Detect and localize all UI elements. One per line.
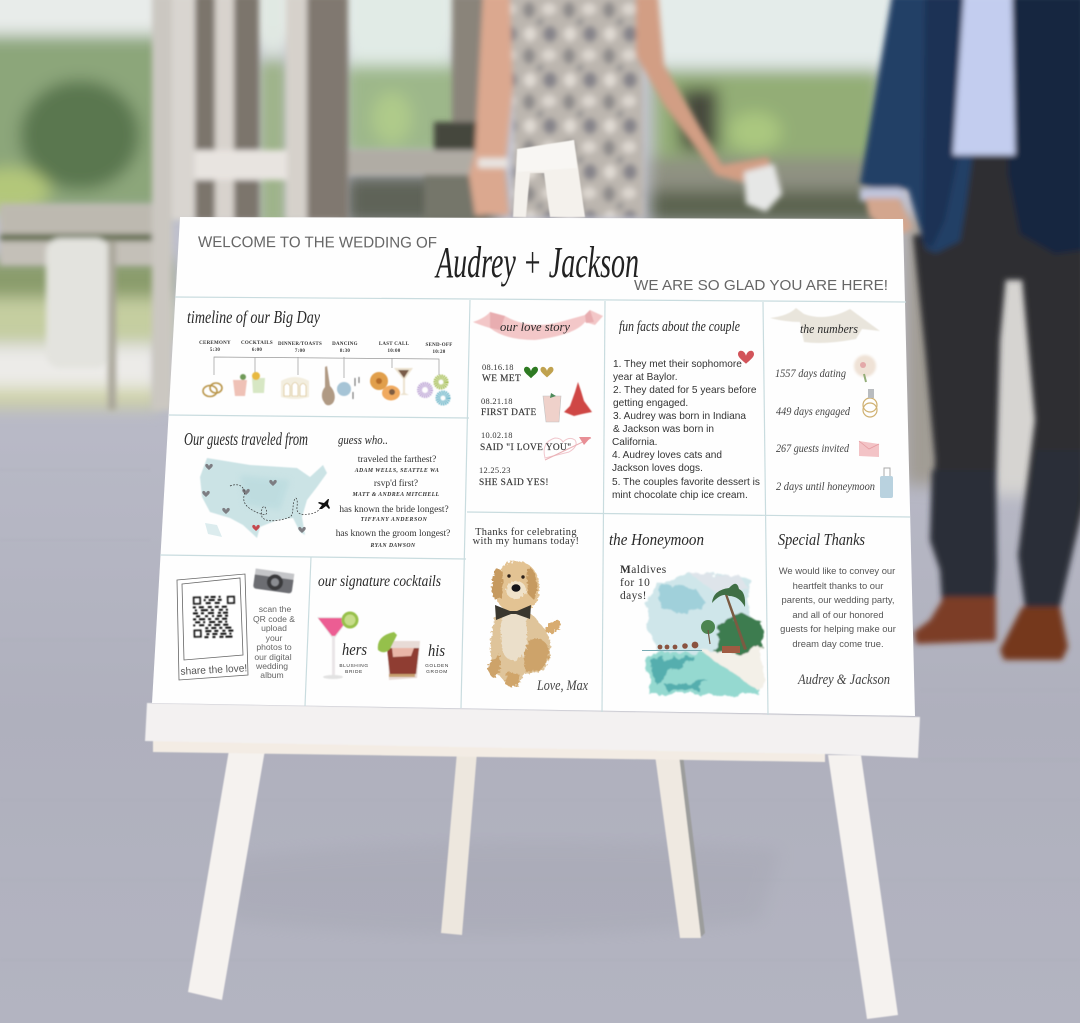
easel: back peg bbox=[513, 140, 585, 217]
QR instructions: photos to bbox=[256, 642, 292, 652]
panel: special thanks bbox=[778, 530, 896, 688]
man: trousers and shoes bbox=[925, 150, 1080, 280]
stat: days dating bbox=[775, 355, 876, 382]
panel: honeymoon bbox=[609, 530, 762, 695]
guess who answers: has known the bride longest? bbox=[339, 505, 449, 515]
dog message: with my humans today! bbox=[473, 536, 579, 547]
stat: days until honeymoon: 2 days until honeymoon bbox=[776, 479, 875, 493]
hers label: BLUSHING bbox=[339, 663, 369, 669]
illustration: Maldives watercolor bbox=[642, 574, 762, 695]
poster board bbox=[152, 217, 915, 716]
honeymoon destination text: Maldives bbox=[620, 564, 667, 576]
panel: love story bbox=[473, 310, 603, 488]
stat: guests invited: 267 guests invited bbox=[776, 441, 850, 455]
guess who answers: ADAM WELLS, SEATTLE WA bbox=[354, 468, 439, 474]
timeline labels: DINNER/TOASTS bbox=[278, 342, 322, 347]
fun facts list: & Jackson was born in bbox=[613, 424, 714, 435]
banner: cream ribbon bbox=[770, 308, 880, 343]
fun facts list bbox=[612, 359, 760, 501]
special thanks heading: Special Thanks bbox=[778, 530, 865, 549]
icon: rings bbox=[203, 383, 222, 396]
milestone: she said yes: SHE SAID YES! bbox=[479, 478, 549, 488]
QR instructions: wedding bbox=[255, 661, 288, 671]
milestone: she said yes bbox=[479, 466, 549, 488]
man: jacket and shirt bbox=[860, 0, 974, 253]
QR instructions: your bbox=[266, 633, 282, 643]
QR instructions: scan the bbox=[259, 604, 291, 614]
illustration: amber rocks glass bbox=[378, 632, 420, 680]
guess who answers: has known the groom longest? bbox=[336, 529, 450, 539]
guess who answers: traveled the farthest? bbox=[358, 454, 436, 465]
his label: his bbox=[428, 641, 445, 660]
hers label: BRIDE bbox=[345, 669, 363, 675]
his label: GOLDEN bbox=[425, 663, 449, 669]
stat: days engaged bbox=[776, 389, 877, 418]
milestone: we met: WE MET bbox=[482, 374, 521, 384]
icon: fireworks bbox=[420, 377, 448, 403]
dog message bbox=[473, 527, 579, 547]
special thanks message: and all of our honored bbox=[792, 609, 884, 620]
map: watercolor USA bbox=[200, 458, 327, 538]
honeymoon destination text bbox=[620, 564, 667, 602]
special thanks message: We would like to convey our bbox=[779, 565, 895, 576]
milestone: she said yes: 12.25.23 bbox=[479, 466, 511, 475]
fun facts list: 3. Audrey was born in Indiana bbox=[613, 411, 746, 422]
QR instructions: QR code & bbox=[253, 614, 295, 624]
his label: GROOM bbox=[426, 669, 448, 675]
fun facts list: Jackson loves dogs. bbox=[612, 463, 703, 474]
guess who answers bbox=[336, 454, 450, 549]
easel: legs bbox=[188, 750, 898, 1019]
milestone: first date bbox=[481, 382, 592, 422]
special thanks message: guests for helping make our bbox=[780, 623, 896, 634]
QR instructions: upload bbox=[261, 623, 287, 633]
header: welcome line: WELCOME TO THE WEDDING OF bbox=[198, 234, 437, 252]
guests heading: Our guests traveled from bbox=[184, 429, 308, 449]
timeline labels: 7:00 bbox=[295, 349, 305, 354]
QR instructions: our digital bbox=[254, 652, 292, 662]
icon: cookies and espresso martini bbox=[370, 368, 413, 400]
timeline labels: 6:00 bbox=[252, 348, 262, 353]
fun facts list: getting engaged. bbox=[613, 398, 688, 409]
guess who answers: MATT & ANDREA MITCHELL bbox=[351, 492, 440, 498]
timeline connector bbox=[214, 357, 439, 378]
illustration: goldendoodle dog bbox=[488, 561, 563, 687]
icon: airplane bbox=[318, 499, 330, 509]
timeline labels: CEREMONY bbox=[199, 341, 231, 346]
panel: guests traveled bbox=[184, 429, 450, 549]
stat: days dating: 1557 days dating bbox=[775, 366, 846, 380]
header: couple names: Audrey + Jackson bbox=[434, 238, 639, 287]
timeline labels: COCKTAILS bbox=[241, 341, 273, 346]
illustration: pink martini bbox=[317, 612, 358, 679]
special thanks message bbox=[779, 565, 896, 649]
woman bbox=[469, 0, 517, 215]
special thanks message: dream day come true. bbox=[792, 638, 884, 649]
QR instructions bbox=[253, 604, 295, 680]
timeline labels bbox=[199, 341, 452, 355]
honeymoon heading: the Honeymoon bbox=[609, 530, 704, 549]
milestone: we met bbox=[482, 363, 554, 384]
cocktails heading: our signature cocktails bbox=[318, 573, 441, 590]
easel: ledge bbox=[145, 703, 920, 762]
numbers heading: the numbers bbox=[800, 321, 858, 336]
timeline labels: SEND-OFF bbox=[426, 343, 452, 348]
icon: red heart bbox=[738, 351, 754, 364]
polaroid frame bbox=[177, 574, 248, 680]
milestone: first date: FIRST DATE bbox=[481, 408, 537, 418]
panel: timeline bbox=[187, 307, 452, 405]
fun facts list: California. bbox=[612, 437, 657, 448]
stat: days until honeymoon bbox=[776, 468, 893, 498]
honeymoon destination text: for 10 bbox=[620, 577, 650, 589]
share caption: share the love! bbox=[180, 663, 248, 678]
panel: signature cocktails bbox=[317, 573, 449, 680]
his label bbox=[425, 641, 449, 675]
milestone: i love you: SAID "I LOVE YOU" bbox=[480, 443, 571, 453]
guess who answers: rsvp'd first? bbox=[374, 478, 418, 489]
fun facts list: mint chocolate chip ice cream. bbox=[612, 490, 748, 501]
panel: fun facts bbox=[612, 319, 760, 501]
panel: dog thanks bbox=[473, 527, 588, 694]
milestone: first date: 08.21.18 bbox=[481, 397, 513, 406]
panel divider lines bbox=[160, 297, 910, 715]
milestone: i love you: 10.02.18 bbox=[481, 431, 513, 440]
icon: cake bbox=[281, 377, 309, 399]
timeline labels: 10:00 bbox=[388, 349, 401, 354]
timeline labels: 10:20 bbox=[433, 350, 446, 355]
milestone: we met: 08.16.18 bbox=[482, 363, 514, 372]
honeymoon destination text: days! bbox=[620, 590, 647, 602]
panel: header bbox=[198, 234, 888, 294]
map: heart markers bbox=[202, 464, 306, 533]
icon: camera bbox=[253, 568, 294, 594]
dog message: Thanks for celebrating bbox=[475, 527, 577, 538]
timeline labels: 8:30 bbox=[340, 349, 350, 354]
hers label: hers bbox=[342, 640, 367, 659]
banner: pink ribbon bbox=[473, 310, 603, 340]
stat: days engaged: 449 days engaged bbox=[776, 404, 851, 418]
fun facts list: 2. They dated for 5 years before bbox=[613, 385, 757, 396]
map: dotted flight route bbox=[230, 485, 320, 521]
guess who answers: TIFFANY ANDERSON bbox=[361, 517, 428, 523]
fun facts heading: fun facts about the couple bbox=[619, 319, 740, 335]
special thanks message: heartfelt thanks to our bbox=[793, 580, 883, 591]
header: glad line: WE ARE SO GLAD YOU ARE HERE! bbox=[634, 277, 888, 294]
special thanks message: parents, our wedding party, bbox=[782, 594, 894, 605]
guess who heading: guess who.. bbox=[338, 432, 388, 447]
icon: cocktail glasses bbox=[233, 372, 265, 396]
signature: love, max: Love, Max bbox=[536, 678, 588, 694]
guess who answers: RYAN DAWSON bbox=[369, 543, 416, 549]
timeline labels: LAST CALL bbox=[379, 342, 410, 347]
panel: share QR bbox=[177, 568, 295, 680]
milestone: i love you bbox=[480, 431, 591, 460]
love story heading: our love story bbox=[500, 319, 570, 334]
timeline labels: DANCING bbox=[332, 342, 358, 347]
timeline heading: timeline of our Big Day bbox=[187, 307, 320, 327]
icon: guitar, disco ball and notes bbox=[322, 366, 359, 405]
fun facts list: 1. They met their sophomore bbox=[613, 359, 742, 370]
fun facts list: 4. Audrey loves cats and bbox=[612, 450, 722, 461]
timeline labels: 5:30 bbox=[210, 348, 220, 353]
signature: couple: Audrey & Jackson bbox=[797, 672, 890, 688]
panel: the numbers bbox=[770, 308, 893, 498]
hers label bbox=[339, 640, 369, 675]
QR code bbox=[193, 597, 235, 637]
fun facts list: year at Baylor. bbox=[613, 372, 678, 383]
QR instructions: album bbox=[260, 670, 284, 680]
fun facts list: 5. The couples favorite dessert is bbox=[612, 477, 760, 488]
